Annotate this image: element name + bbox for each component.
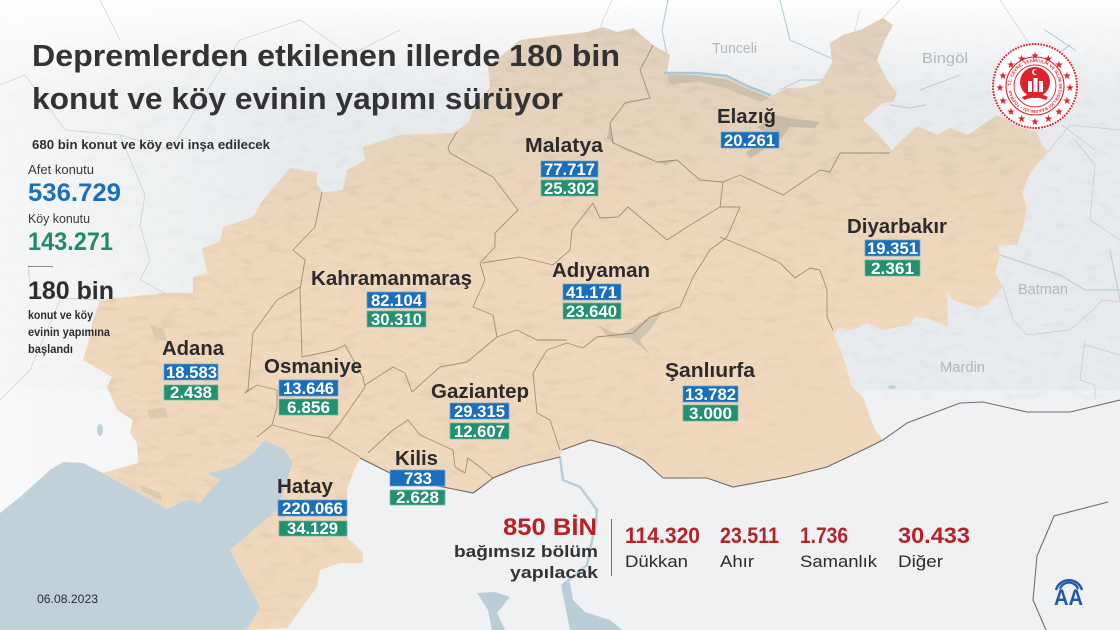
- label: Elazig: [717, 106, 779, 150]
- bottom stats: 850 bin: 850 BİN: [503, 514, 597, 541]
- grey city names outside region: Batman: [1018, 282, 1068, 298]
- label: Kilis: 2.628: [396, 489, 439, 507]
- title: [32, 38, 620, 116]
- stars: ★: [1007, 107, 1016, 118]
- label: Kilis: Kilis: [395, 448, 438, 470]
- label: Adiyaman: [552, 260, 650, 321]
- stat: dukkan: [625, 523, 700, 571]
- stars: ★: [1055, 107, 1064, 118]
- label: Malatya: 25.302: [544, 180, 595, 198]
- koy konutu: [28, 211, 113, 256]
- title: Depremlerden etkilenen illerde 180 bin: [32, 38, 620, 73]
- grey city names outside region: Bingöl: [922, 51, 968, 67]
- date: 06.08.2023: [37, 594, 98, 606]
- afet konutu: [28, 162, 121, 207]
- stars: ★: [1063, 71, 1072, 82]
- 180 bin: başlandı: [28, 344, 73, 356]
- stat: ahir: 23.511: [720, 523, 779, 548]
- label: Adana: 2.438: [170, 384, 212, 402]
- bottom stats: 850 bin: bağımsız bölüm: [454, 542, 598, 561]
- stars: [996, 51, 1075, 128]
- label: Kahramanmaras: [311, 268, 472, 329]
- label: Diyarbakir: 2.361: [871, 260, 914, 278]
- label: Osmaniye: [264, 356, 362, 417]
- icon: AA logo: AA: [1054, 585, 1083, 610]
- grey city names outside region: Mardin: [940, 360, 985, 376]
- afet konutu: 536.729: [28, 179, 121, 207]
- label: Hatay: 220.066: [282, 500, 343, 518]
- stars: ★: [1031, 117, 1040, 128]
- stars: ★: [1017, 114, 1026, 125]
- koy konutu: Köy konutu: [28, 211, 90, 226]
- label: Kahramanmaras: Kahramanmaraş: [311, 268, 472, 290]
- label: Kilis: 733: [404, 470, 432, 488]
- stars: ★: [1066, 83, 1075, 94]
- sea: [0, 440, 293, 630]
- stat: dukkan: 114.320: [625, 523, 700, 548]
- label: Kilis: [390, 448, 445, 507]
- koy konutu: 143.271: [28, 228, 113, 256]
- label: Gaziantep: Gaziantep: [431, 381, 529, 403]
- afet konutu: Afet konutu: [28, 162, 94, 177]
- label: Adana: Adana: [162, 338, 225, 360]
- label: Elazig: 20.261: [724, 132, 775, 150]
- stat: diger: [898, 523, 970, 571]
- 180 bin: 180 bin: [28, 277, 114, 305]
- bottom stats: 850 bin: [454, 514, 970, 582]
- grey city names outside region: [712, 41, 1068, 376]
- label: Gaziantep: 29.315: [454, 403, 505, 421]
- 180 bin: evinin yapımına: [28, 327, 111, 339]
- label: Adana: 18.583: [166, 364, 217, 382]
- left stats panel: [28, 137, 271, 356]
- stars: ★: [999, 96, 1008, 107]
- label: Adana: [162, 338, 225, 402]
- stat: diger: 30.433: [898, 523, 970, 548]
- stars: ★: [1007, 60, 1016, 71]
- label: Elazig: Elazığ: [717, 106, 776, 128]
- stat: samanlik: Samanlık: [800, 552, 878, 571]
- label: Osmaniye: 6.856: [287, 399, 330, 417]
- stat: ahir: Ahır: [720, 552, 754, 571]
- stars: ★: [1044, 54, 1053, 65]
- label: Gaziantep: [431, 381, 529, 441]
- label: Hatay: [277, 476, 347, 538]
- label: Diyarbakir: 19.351: [867, 240, 918, 258]
- label: Adiyaman: 41.171: [566, 284, 617, 302]
- 180 bin: [28, 277, 114, 356]
- label: Malatya: Malatya: [525, 135, 604, 157]
- label: Hatay: 34.129: [287, 520, 338, 538]
- label: Sanliurfa: 3.000: [689, 405, 732, 423]
- stars: ★: [999, 71, 1008, 82]
- label: Malatya: [525, 135, 604, 198]
- outline: [360, 440, 883, 493]
- label: Diyarbakir: [847, 216, 947, 278]
- stars: ★: [996, 83, 1005, 94]
- grey city names outside region: Tunceli: [712, 41, 757, 57]
- stars: ★: [1017, 54, 1026, 65]
- stars: ★: [1055, 60, 1064, 71]
- label: Sanliurfa: [665, 360, 756, 423]
- label: Adiyaman: 23.640: [566, 303, 617, 321]
- label: Osmaniye: 13.646: [283, 380, 334, 398]
- stat: dukkan: Dükkan: [625, 552, 688, 571]
- label: Adiyaman: Adıyaman: [552, 260, 650, 282]
- label: Hatay: Hatay: [277, 476, 334, 498]
- title: konut ve köy evinin yapımı sürüyor: [32, 81, 563, 116]
- stars: ★: [1044, 114, 1053, 125]
- label: Kahramanmaras: 30.310: [371, 311, 422, 329]
- subtitle: 680 bin konut ve köy evi inşa edilecek: [32, 137, 271, 152]
- stat: samanlik: 1.736: [800, 523, 848, 548]
- seal ring text: T.C. ÇEVRE, ŞEHİRCİLİK VE İKLİM DEĞİŞİKLİĞİ BAKANLIĞI • TOPRAK: [1008, 58, 1062, 113]
- stat: ahir: [720, 523, 779, 571]
- label: Osmaniye: Osmaniye: [264, 356, 362, 378]
- stat: diger: Diğer: [898, 552, 943, 571]
- northern reservoir edge: [665, 73, 770, 95]
- bottom stats: 850 bin: yapılacak: [510, 563, 599, 582]
- emblem: ministry seal: [992, 42, 1078, 130]
- label: Gaziantep: 12.607: [454, 423, 505, 441]
- label: Diyarbakir: Diyarbakır: [847, 216, 947, 238]
- label: Sanliurfa: 13.782: [685, 386, 736, 404]
- province borders: [245, 45, 890, 478]
- label: Kahramanmaras: 82.104: [371, 292, 423, 310]
- stars: ★: [1063, 96, 1072, 107]
- syrian border: [883, 400, 1120, 630]
- terrain relief: [90, 18, 1046, 596]
- stat: samanlik: [800, 523, 878, 571]
- 180 bin: konut ve köy: [28, 310, 94, 322]
- label: Sanliurfa: Şanlıurfa: [665, 360, 756, 382]
- stars: ★: [1031, 51, 1040, 62]
- label: Malatya: 77.717: [544, 161, 595, 179]
